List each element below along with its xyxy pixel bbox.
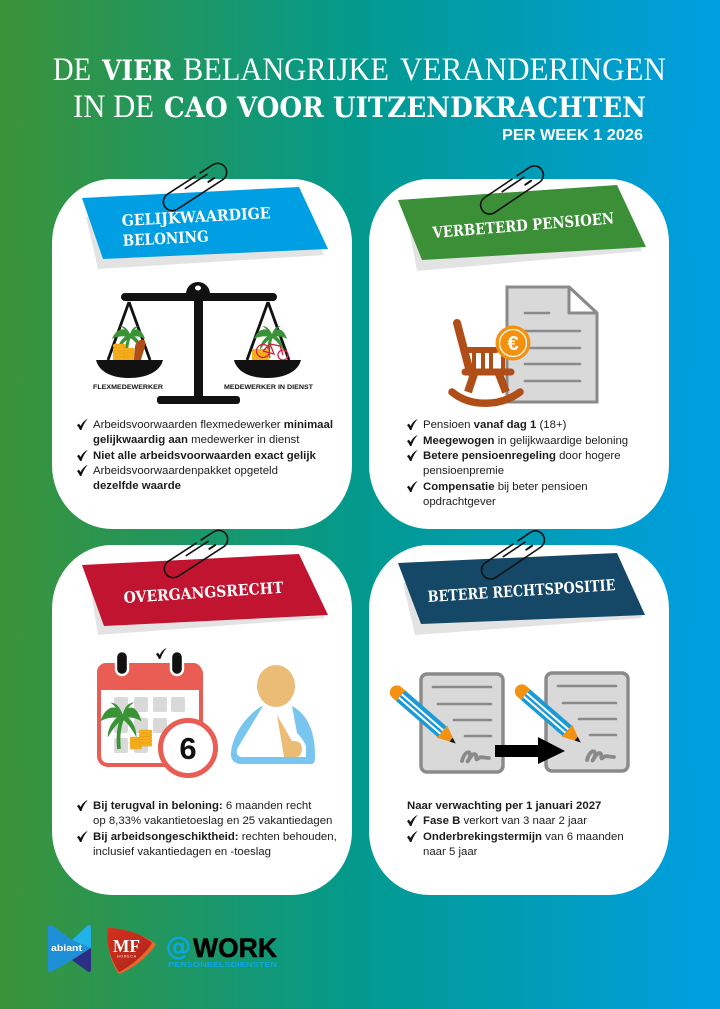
banner: overgangsrecht (82, 554, 328, 635)
checklist (407, 800, 624, 858)
logo: @work personeelsdiensten (166, 932, 277, 969)
checklist: Betere pensioenregeling door hogere (423, 450, 621, 462)
subtitle: PER WEEK 1 2026 (502, 127, 643, 144)
checklist: opdrachtgever (423, 496, 496, 508)
arrow (495, 737, 565, 764)
logo: @work personeelsdiensten: PERSONEELSDIENSTEN (168, 960, 277, 969)
icon: paperclip (160, 160, 230, 214)
checklist: Arbeidsvoorwaarden flexmedewerker minimaal (93, 419, 333, 431)
logo: MF horeca (107, 928, 156, 974)
checklist (77, 419, 333, 492)
title: DE (53, 52, 91, 88)
panel: betere rechtspositie (369, 527, 669, 895)
checklist: dezelfde waarde (93, 480, 181, 492)
banner: betere rechtspositie: BETERE RECHTSPOSITIE (427, 575, 616, 606)
checklist (407, 419, 628, 508)
title: BELANGRIJKE (183, 52, 389, 88)
banner: gelijkwaardige beloning: BELONING (122, 227, 209, 250)
banner: betere rechtspositie (398, 553, 645, 635)
banner: overgangsrecht: OVERGANGSRECHT (123, 578, 284, 607)
checklist: gelijkwaardig aan medewerker in dienst (93, 434, 300, 446)
checklist: inclusief vakantiedagen en -toeslag (93, 846, 271, 858)
icon: pension document (507, 287, 597, 402)
checklist: Bij terugval in beloning: 6 maanden recht (93, 800, 312, 812)
checklist: op 8,33% vakantietoeslag en 25 vakantiedagen (93, 815, 332, 827)
icon: calendar (97, 648, 216, 776)
logo: @work personeelsdiensten: WORK (193, 933, 277, 963)
icon: euro coin: € (507, 333, 519, 355)
checklist: Naar verwachting per 1 januari 2027 (407, 800, 601, 812)
icon: paperclip (477, 162, 547, 218)
banner: gelijkwaardige beloning: GELIJKWAARDIGE (121, 203, 271, 230)
panel: verbeterd pensioen (369, 162, 669, 529)
icon: balance scale (96, 282, 301, 404)
checklist: Meegewogen in gelijkwaardige beloning (423, 435, 628, 447)
label: flexmedewerker: FLEXMEDEWERKER (93, 384, 163, 391)
checklist: Fase B verkort van 3 naar 2 jaar (423, 815, 587, 827)
title: CAO VOOR UITZENDKRACHTEN (164, 91, 646, 124)
icon: paperclip (478, 527, 548, 583)
icon: rocking chair (452, 323, 520, 403)
title (53, 52, 666, 125)
logo: abiant: abiant (51, 943, 82, 953)
icon: person with arm in sling (231, 665, 315, 764)
checklist: Bij arbeidsongeschiktheid: rechten behouden, (93, 831, 337, 843)
banner: gelijkwaardige beloning (82, 187, 328, 269)
icon: pencil after (511, 681, 586, 749)
label: medewerker in dienst: MEDEWERKER IN DIENST (224, 384, 313, 391)
checklist: pensioenpremie (423, 465, 504, 477)
title: VERANDERINGEN (400, 52, 666, 88)
checklist: Niet alle arbeidsvoorwaarden exact gelijk (93, 450, 317, 462)
icon: signed document after (546, 673, 628, 771)
icon: calendar: 6 (179, 731, 197, 766)
checklist: Onderbrekingstermijn van 6 maanden (423, 831, 624, 843)
icon: euro coin (496, 326, 530, 360)
checklist (77, 800, 337, 858)
logo: MF horeca: HORECA (117, 954, 137, 958)
banner: verbeterd pensioen: VERBETERD PENSIOEN (431, 208, 615, 242)
title: VIER (101, 54, 174, 87)
panel: overgangsrecht (52, 527, 352, 895)
icon: pencil before (386, 682, 461, 750)
title: IN DE (73, 89, 154, 125)
checklist: Arbeidsvoorwaardenpakket opgeteld (93, 465, 278, 477)
logo: MF horeca: MF (113, 936, 140, 956)
panel: gelijkwaardige beloning (52, 160, 352, 529)
checklist: naar 5 jaar (423, 846, 478, 858)
logo: @work personeelsdiensten: @ (166, 932, 192, 962)
banner: verbeterd pensioen (398, 185, 646, 271)
icon: signed document before (421, 674, 503, 772)
checklist: Pensioen vanaf dag 1 (18+) (423, 419, 567, 431)
checklist: Compensatie bij beter pensioen (423, 481, 588, 493)
logo: abiant (48, 925, 91, 972)
icon: paperclip (161, 527, 231, 581)
